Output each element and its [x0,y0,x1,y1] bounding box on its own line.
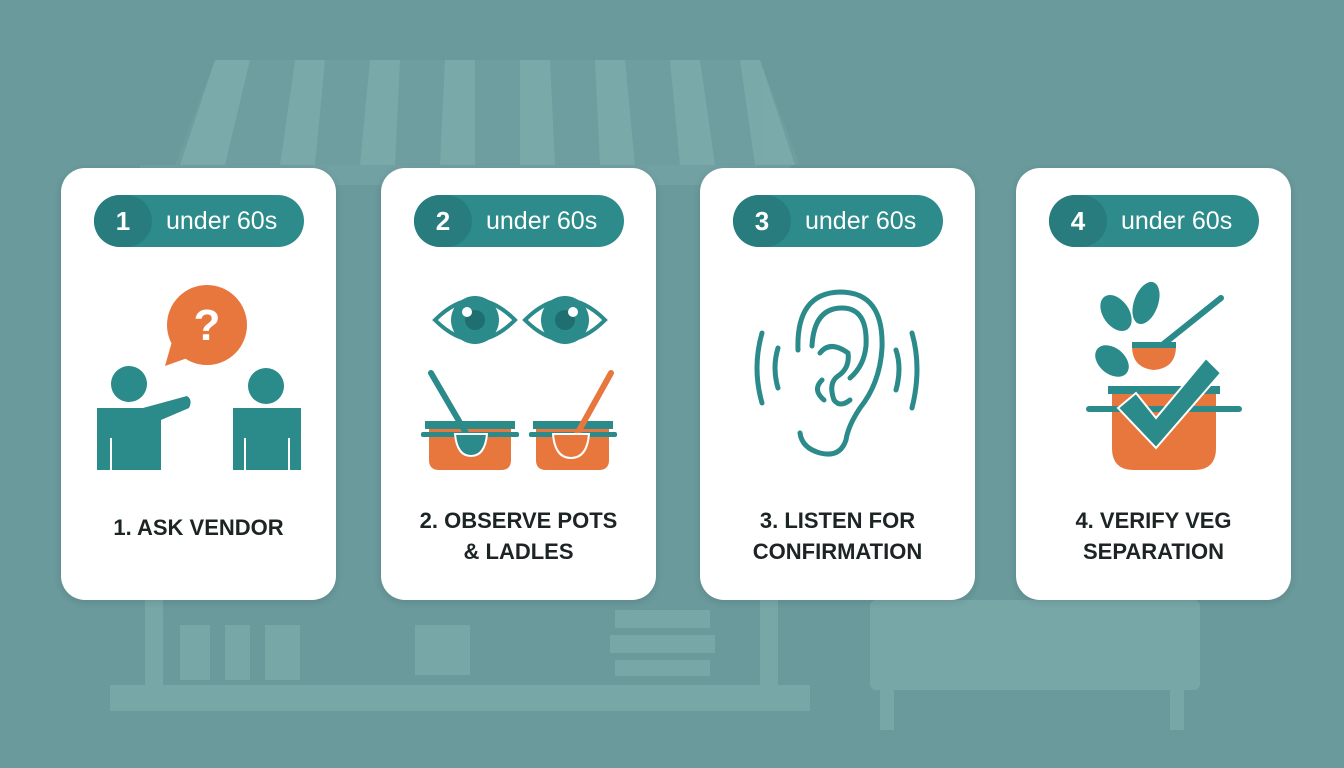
badge 2: 2 [436,206,450,236]
caption 3 [753,508,922,564]
icon: ear with sound waves [754,290,920,457]
caption 4 [1075,508,1232,564]
caption 2: & LADLES [464,539,574,564]
badge 3: under 60s [805,207,916,235]
badge 2: under 60s [486,207,597,235]
caption 2 [420,508,617,564]
badge 1 [94,195,304,247]
badge 4 [1049,195,1259,247]
badge 2 [414,195,624,247]
icon: eyes and pots [421,296,617,470]
caption 4: SEPARATION [1083,539,1224,564]
panel: step 4 [1016,168,1291,600]
panel: step 1 [61,168,336,600]
icon: ask vendor [97,285,301,470]
caption 3: 3. LISTEN FOR [760,508,915,533]
caption 4: 4. VERIFY VEG [1075,508,1232,533]
caption 2: 2. OBSERVE POTS [420,508,617,533]
badge 4: under 60s [1121,207,1232,235]
panel: step 2 [381,168,656,600]
badge 1: 1 [116,206,130,236]
caption 1: 1. ASK VENDOR [113,515,284,540]
badge 3: 3 [755,206,769,236]
badge 3 [733,195,943,247]
badge 1: under 60s [166,207,277,235]
caption 3: CONFIRMATION [753,539,922,564]
panel: step 3 [700,168,975,600]
badge 4: 4 [1071,206,1085,236]
icon: veg pot with check [1086,282,1242,470]
icon: ask vendor: ? [194,301,220,350]
